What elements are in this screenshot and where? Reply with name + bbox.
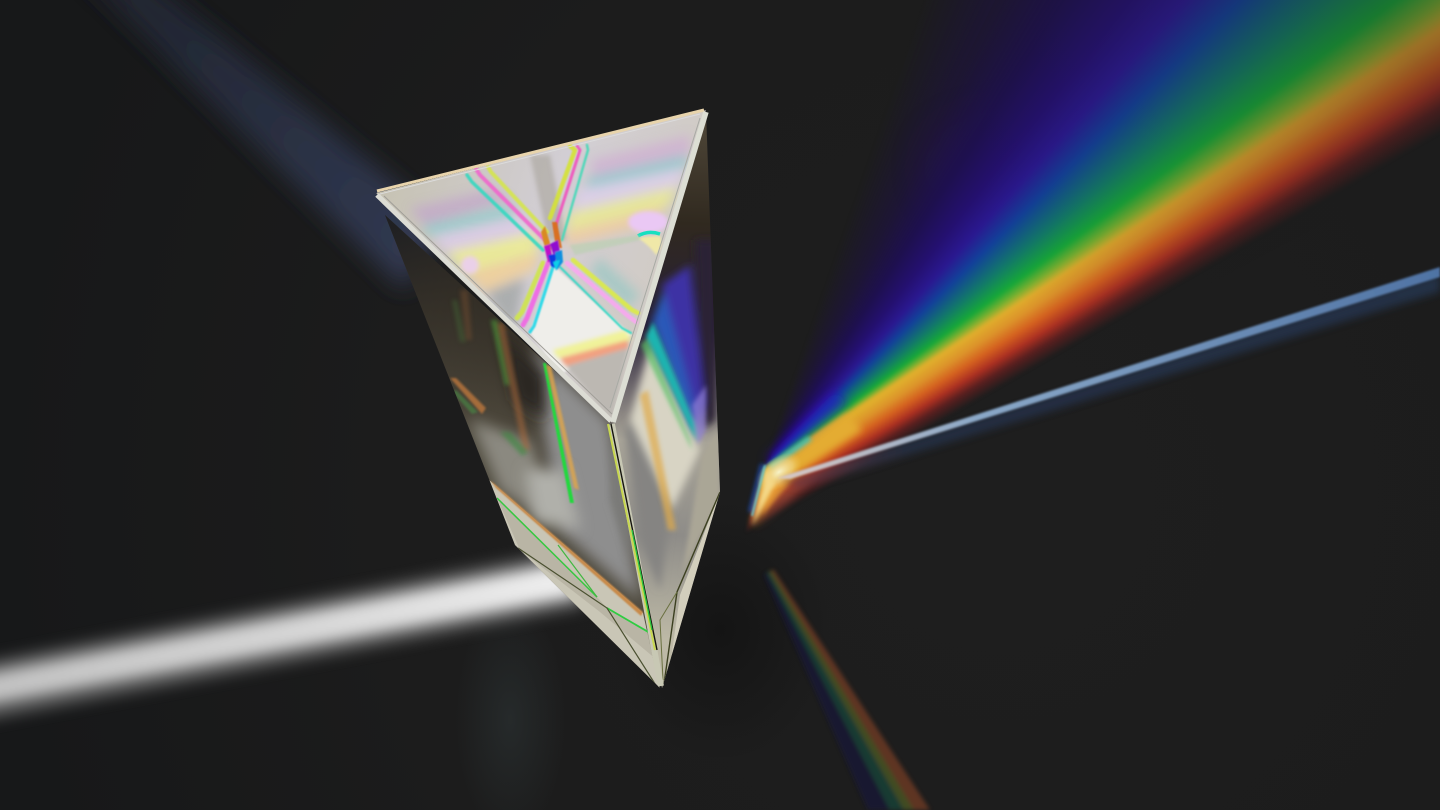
left face lower cream facets	[488, 479, 660, 690]
prism left face	[385, 215, 660, 688]
foreground layer	[375, 0, 1440, 810]
prism top face	[376, 110, 706, 423]
prism front vertical edge	[608, 424, 661, 686]
rainbow apex glow	[749, 392, 862, 528]
white light beam	[0, 550, 585, 722]
faint dark shadow under prism	[610, 500, 830, 760]
prism top rim edges	[377, 110, 706, 422]
rainbow spectrum beam	[746, 0, 1440, 530]
purple glow above rainbow	[940, 132, 1090, 204]
rainbow distance fade	[748, 0, 1440, 530]
thin blue reflected beam	[777, 267, 1440, 488]
white lower kite	[530, 265, 632, 375]
prism	[370, 100, 730, 700]
grey centre wedge	[530, 155, 566, 240]
cyan highlight spot	[628, 211, 668, 255]
center burst	[541, 222, 563, 271]
incoming faint blue beam	[75, 0, 445, 290]
right face rainbow streak	[652, 240, 716, 435]
prism right face	[612, 120, 720, 688]
rainbow X arms	[467, 145, 638, 333]
iridescent bands, right	[564, 135, 690, 308]
iridescent bands, left	[410, 190, 540, 330]
faint secondary rainbow lower right	[764, 570, 930, 810]
left face light streaks	[450, 290, 579, 503]
faint reflection under white beam	[455, 600, 565, 810]
lower arc	[553, 330, 632, 420]
